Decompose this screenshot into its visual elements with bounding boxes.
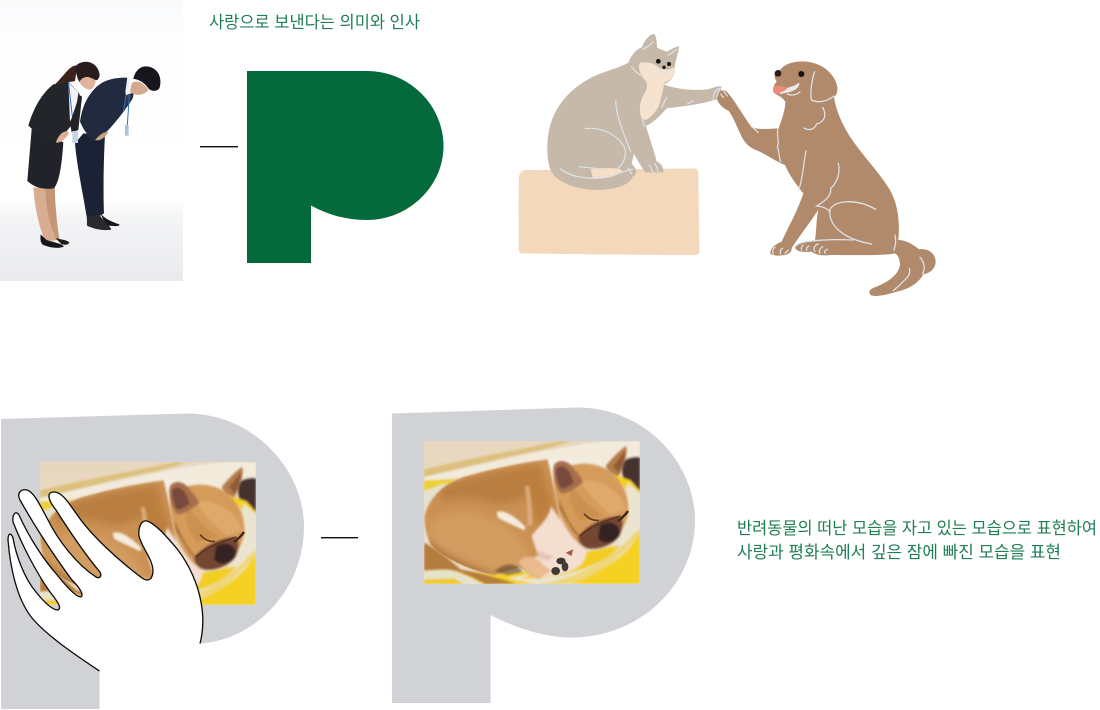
woman: [33, 187, 57, 242]
illustration: cat and dog high five: [519, 34, 936, 296]
sleeping dog photo right: [424, 441, 640, 584]
cat: [547, 34, 722, 190]
cushion: [519, 168, 699, 255]
heading: greeting: 사랑으로 보낸다는 의미와 인사: [209, 13, 420, 32]
dash: first row: [200, 146, 238, 147]
grey P shape left: [1, 414, 304, 709]
description text: 반려동물의 떠난 모습을 자고 있는 모습으로 표현하여: [737, 519, 1097, 538]
grey P with dog photo: [392, 408, 695, 703]
sleeping dog photo left: [40, 462, 256, 605]
description text: [737, 519, 1097, 562]
photo: two people bowing: [0, 0, 183, 281]
man: [75, 133, 105, 217]
dog: [717, 61, 936, 296]
hand fill: [8, 490, 203, 671]
dash: second row: [321, 537, 358, 538]
hand outline: [8, 490, 203, 671]
grey P with dog photo and hand: [1, 414, 304, 709]
green P mark: [247, 71, 444, 263]
grey P shape right: [392, 408, 695, 703]
description text: 사랑과 평화속에서 깊은 잠에 빠진 모습을 표현: [737, 543, 1061, 562]
